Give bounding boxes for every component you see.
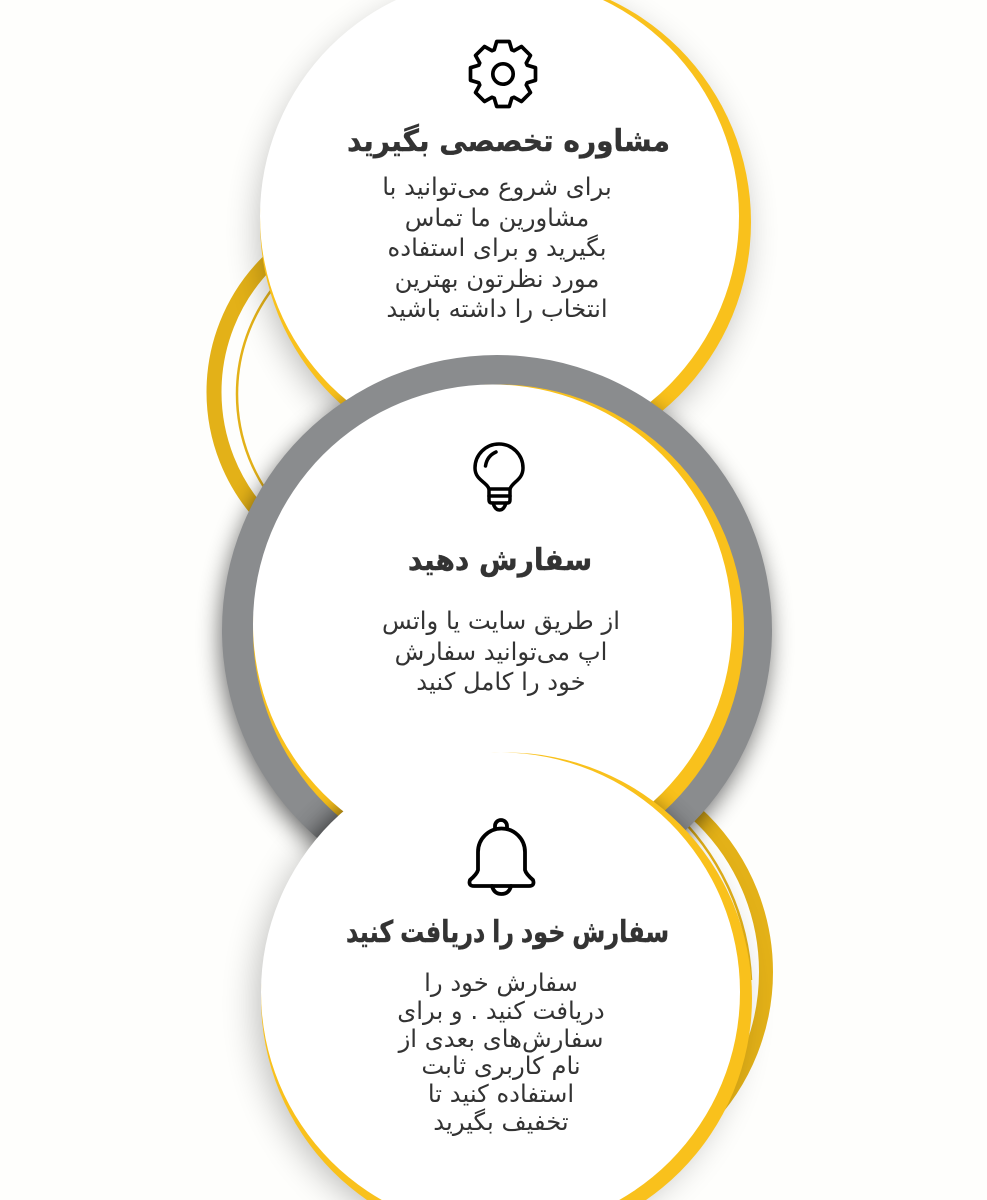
shadow: third circle on background	[258, 764, 738, 1200]
text block: second circle	[382, 606, 620, 696]
decorative ring: upper left	[214, 209, 585, 575]
text block: first circle	[382, 172, 612, 323]
panel: first circle yellow edge	[260, 0, 751, 468]
text block: third circle: دریافت کنید . و برای	[397, 996, 605, 1025]
shadow: first circle	[262, 0, 742, 472]
text block: first circle: مشاورین ما تماس	[405, 203, 589, 232]
shadow: third circle on grey ring	[306, 794, 689, 838]
text block: second circle: از طریق سایت یا واتس	[382, 606, 620, 635]
text block: second circle: خود را کامل کنید	[416, 667, 586, 696]
icon: bell	[470, 820, 534, 894]
text block: first circle: انتخاب را داشته باشید	[386, 294, 608, 323]
decorative ring: lower right	[336, 757, 766, 1187]
icon: light bulb	[475, 444, 523, 510]
text block: third circle: استفاده کنید تا	[428, 1079, 574, 1108]
heading: third circle: سفارش خود را دریافت کنید	[346, 915, 669, 950]
heading: second circle: سفارش دهید	[408, 542, 592, 577]
panel: first circle	[260, 0, 739, 456]
panel: second circle yellow edge	[253, 384, 744, 876]
text block: third circle: نام کاربری ثابت	[421, 1051, 581, 1080]
text block: third circle: سفارش‌های بعدی از	[397, 1024, 603, 1053]
text block: third circle	[397, 968, 605, 1136]
text block: first circle: بگیرید و برای استفاده	[388, 233, 606, 262]
icon: gear	[471, 42, 535, 106]
panel: grey ring	[222, 355, 772, 905]
text block: first circle: مورد نظرتون بهترین	[395, 264, 599, 293]
panel: third circle	[261, 752, 752, 1200]
text block: third circle: سفارش خود را	[424, 968, 578, 997]
shadow: grey ring	[221, 364, 769, 912]
panel: second circle	[253, 384, 732, 864]
text block: third circle: تخفیف بگیرید	[433, 1107, 569, 1136]
heading: first circle: مشاوره تخصصی بگیرید	[347, 123, 670, 158]
text block: first circle: برای شروع می‌توانید با	[382, 172, 612, 201]
text block: second circle: اپ می‌توانید سفارش	[395, 637, 607, 666]
